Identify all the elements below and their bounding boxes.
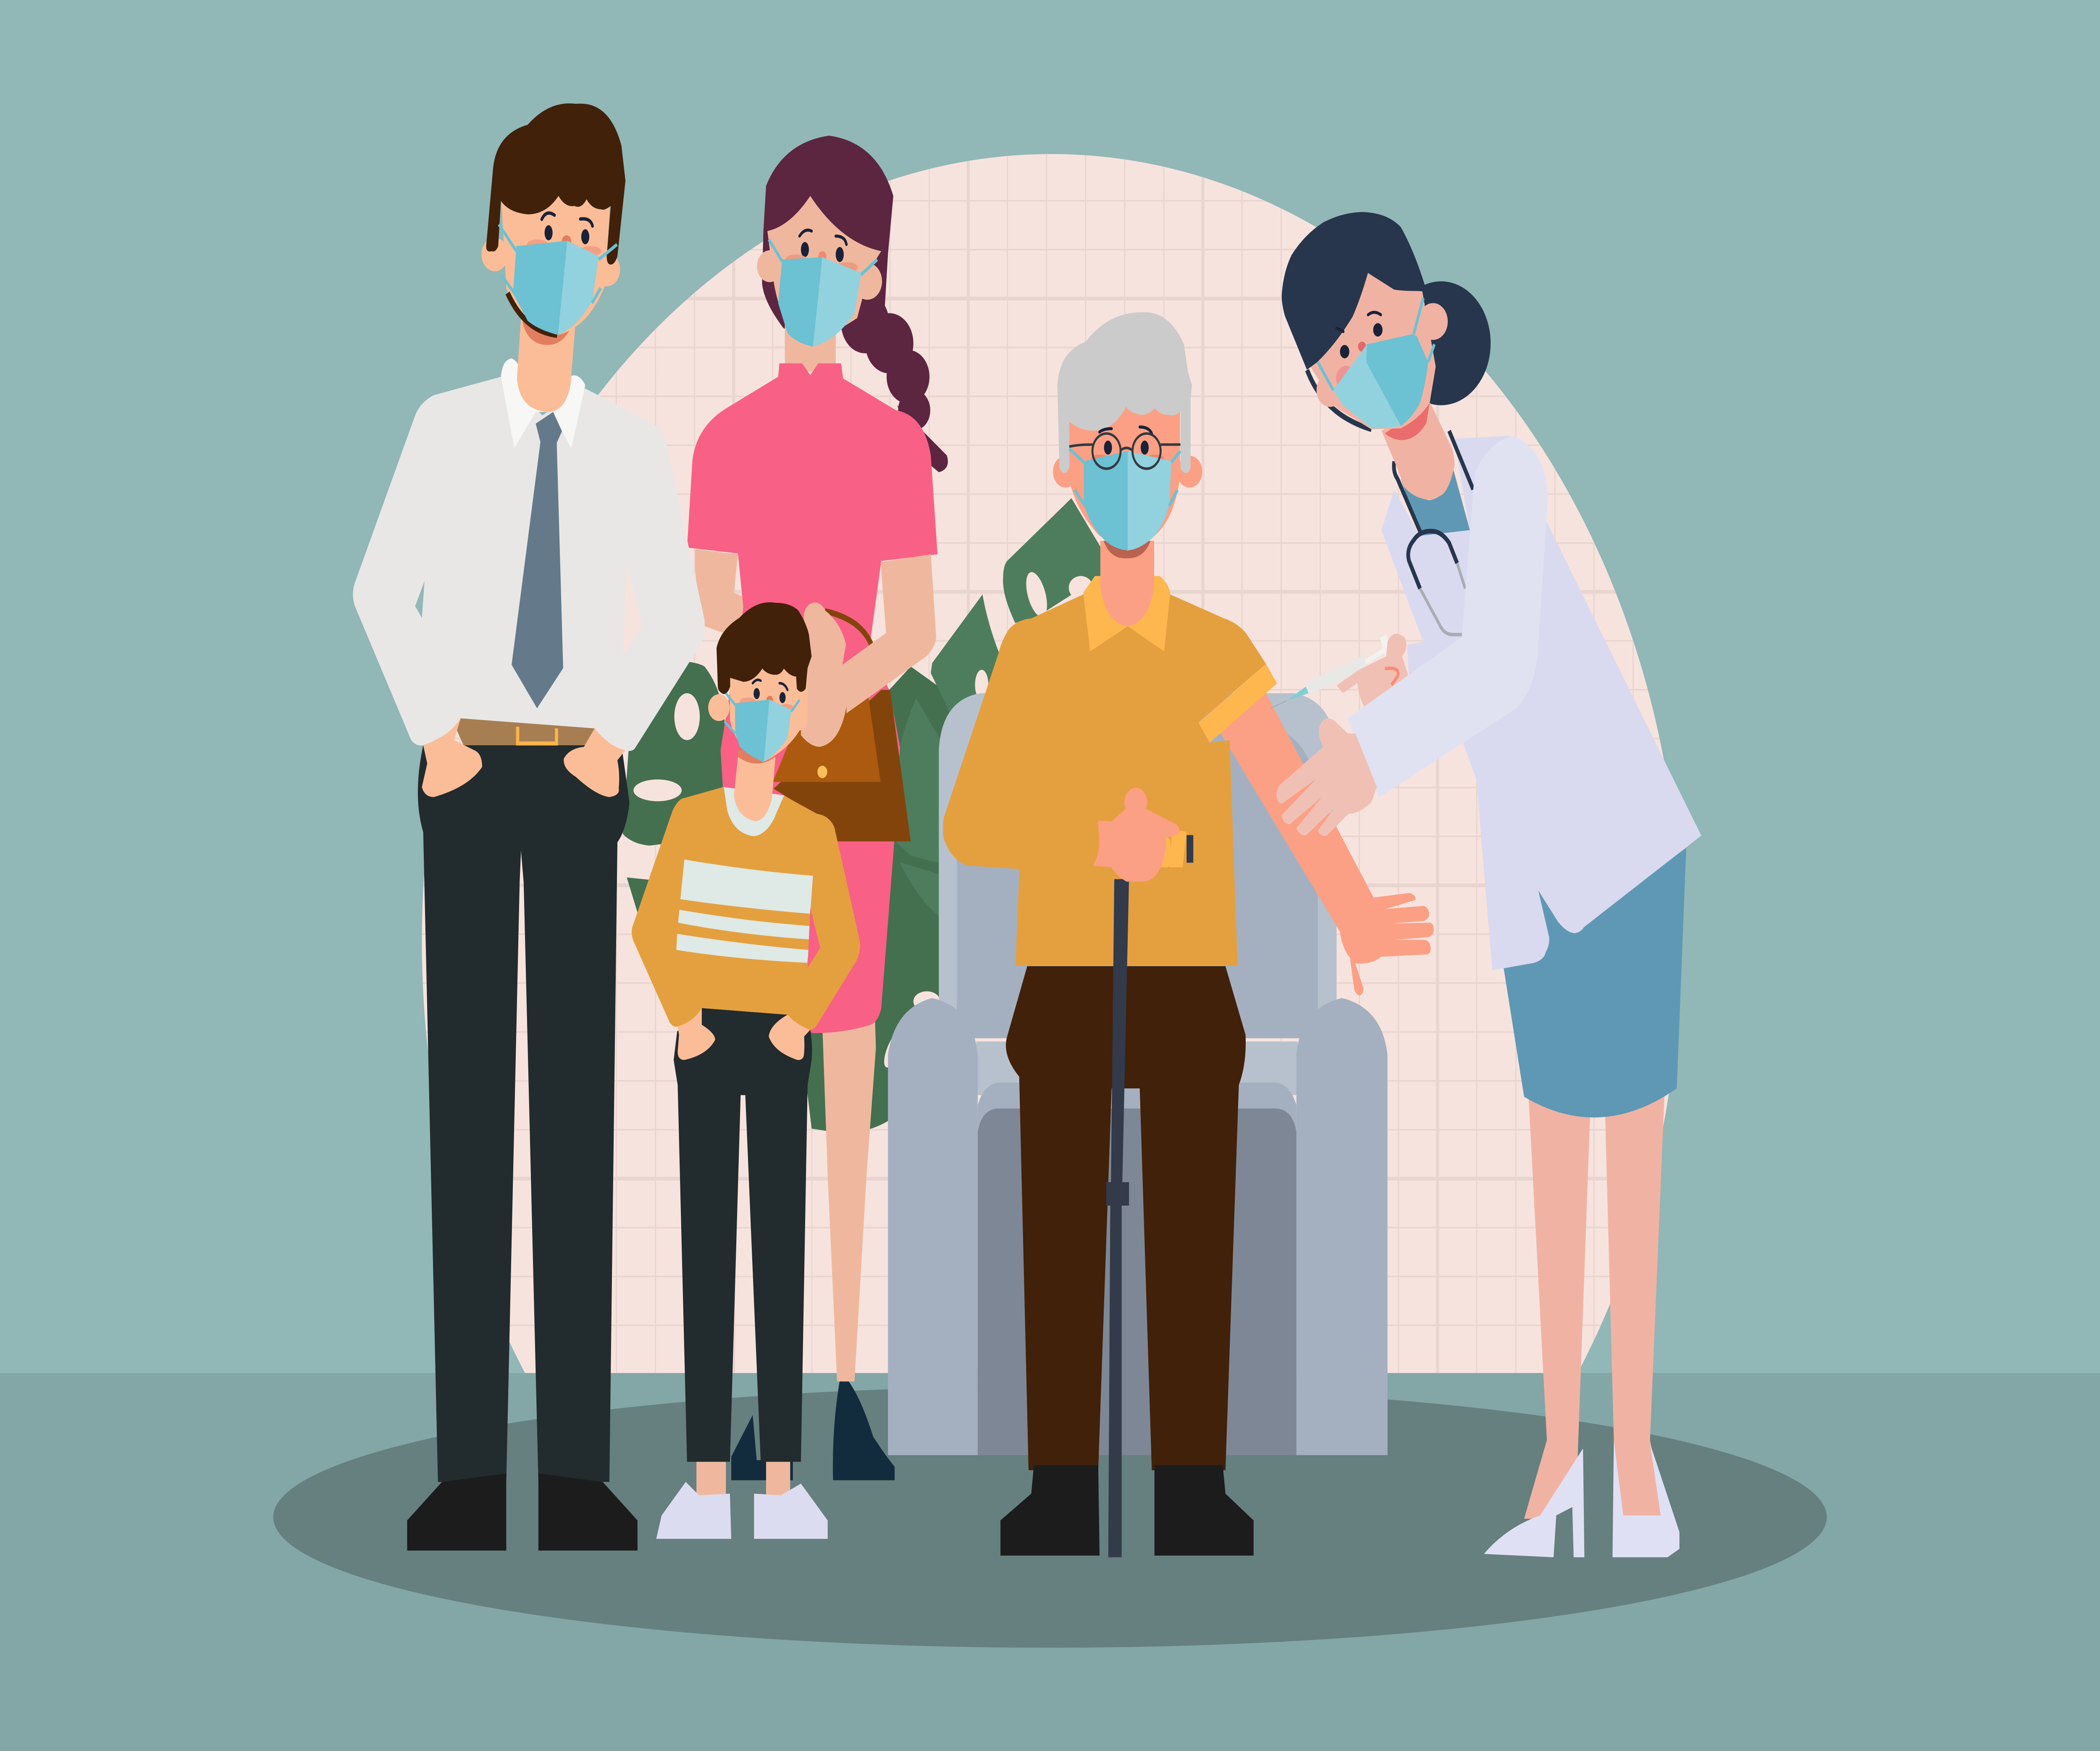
nurse: ring: [1385, 668, 1398, 685]
man: mask: [499, 224, 617, 335]
woman: legs: [822, 1005, 876, 1381]
nurse: mask: [1318, 298, 1434, 429]
man: eyes, brows, cheeks and nose: [527, 213, 601, 256]
armchair: [888, 693, 1388, 1455]
woman in pink dress: [687, 136, 948, 1480]
boy: sweater gaps: [808, 907, 820, 968]
nurse: shoes: [1484, 1440, 1680, 1557]
elder: chin: [1104, 541, 1150, 558]
nurse: chin: [1385, 403, 1430, 440]
boy: face: [730, 661, 808, 762]
nurse: [1270, 212, 1701, 1557]
boy: left hand: [678, 1008, 715, 1060]
boy: [632, 602, 860, 1539]
elder: face: [1069, 402, 1180, 551]
woman: ears: [757, 250, 782, 282]
nurse: stethoscope upper tubes: [1394, 431, 1473, 535]
man: left hand: [422, 718, 482, 797]
nurse: stethoscope: [1408, 531, 1465, 635]
elder: mask: [1069, 449, 1181, 550]
elder: trousers: [1006, 966, 1246, 1470]
nurse: face: [1307, 273, 1436, 429]
nurse: eyes and brows: [1333, 312, 1383, 392]
man: right armpit gap: [623, 563, 642, 656]
elder: watch: [1158, 831, 1193, 868]
nurse: syringe: [1270, 635, 1395, 708]
woman: neck: [785, 318, 836, 372]
boy: mask: [724, 693, 800, 762]
man: face: [501, 192, 611, 335]
woman: right ear: [853, 263, 882, 300]
woman: bag strap: [825, 611, 873, 650]
man: tie: [512, 412, 563, 708]
nurse: legs: [1524, 1088, 1665, 1519]
nurse: skirt: [1493, 848, 1686, 1117]
elder: sleeve cuff: [1199, 664, 1277, 743]
elder: ears: [1053, 456, 1202, 488]
nurse: left ear: [1317, 373, 1343, 407]
woman: hair and braid: [762, 136, 948, 472]
man: hair: [486, 103, 625, 265]
woman: right arm and hand: [801, 554, 936, 747]
nurse: upper hand: [1336, 634, 1409, 708]
boy: ears: [708, 694, 808, 731]
man: chin: [522, 321, 573, 345]
nurse: neck: [1381, 403, 1454, 500]
man: chin strap: [508, 293, 557, 335]
elder: bare arm and hand: [1203, 693, 1434, 996]
nurse: lower hand on arm: [1276, 718, 1377, 836]
elder: shoes: [1000, 1465, 1254, 1556]
man: shirt: [353, 377, 705, 751]
elder: eyes and brows: [1100, 427, 1152, 455]
boy: neck: [734, 757, 775, 821]
elder: neck: [1100, 541, 1154, 626]
elderly man seated: [943, 312, 1434, 1557]
elder: glasses: [1069, 434, 1181, 469]
boy: ankles: [696, 1462, 790, 1499]
woman: mask: [769, 239, 877, 347]
boy: trousers: [674, 1008, 812, 1462]
man: belt: [455, 718, 595, 745]
woman: bag: [773, 690, 911, 841]
floor shadow: [273, 1386, 1827, 1648]
pink circle backdrop with grid: [402, 151, 1701, 1373]
elder: hair: [1058, 312, 1192, 473]
nurse: sleeve: [1348, 436, 1548, 797]
boy: stripes: [676, 860, 813, 963]
nurse: hair: [1282, 212, 1425, 370]
woman: dress: [687, 363, 937, 1033]
man: left armpit gap: [415, 581, 425, 618]
boy: sweater: [632, 787, 860, 1030]
woman: face: [767, 196, 881, 347]
nurse: inner blue top: [1401, 464, 1470, 637]
boy: hair: [717, 602, 811, 694]
man: right hand: [564, 728, 625, 797]
nurse: right ear: [1418, 303, 1448, 340]
nurse: coat: [1381, 436, 1701, 970]
man: trousers: [418, 745, 630, 1482]
woman: shoes: [731, 1373, 895, 1480]
boy: right hand: [769, 1015, 810, 1060]
boy: shoes: [656, 1482, 828, 1539]
man in white shirt: [353, 103, 705, 1551]
boy: collar: [724, 787, 784, 836]
elder: collar: [1083, 576, 1170, 651]
man: ears: [481, 238, 620, 287]
elder: cane: [1106, 879, 1129, 1557]
nurse: bun: [1391, 281, 1491, 405]
plants: [623, 498, 1101, 1133]
woman: left arm: [695, 549, 803, 661]
elder: hand on cane: [1093, 788, 1180, 882]
nurse: jaw line: [1307, 370, 1371, 429]
man: neck: [517, 318, 576, 412]
elder: cheeks: [1091, 455, 1164, 463]
man: shoes: [407, 1474, 638, 1551]
elder: shirt: [943, 594, 1266, 966]
boy: eyes, brows, cheeks and nose: [740, 680, 794, 712]
boy: chin: [738, 750, 775, 775]
woman: eyes, brows, cheeks and nose: [785, 230, 858, 272]
floor: [0, 1373, 2100, 1751]
man: collar: [501, 358, 585, 448]
